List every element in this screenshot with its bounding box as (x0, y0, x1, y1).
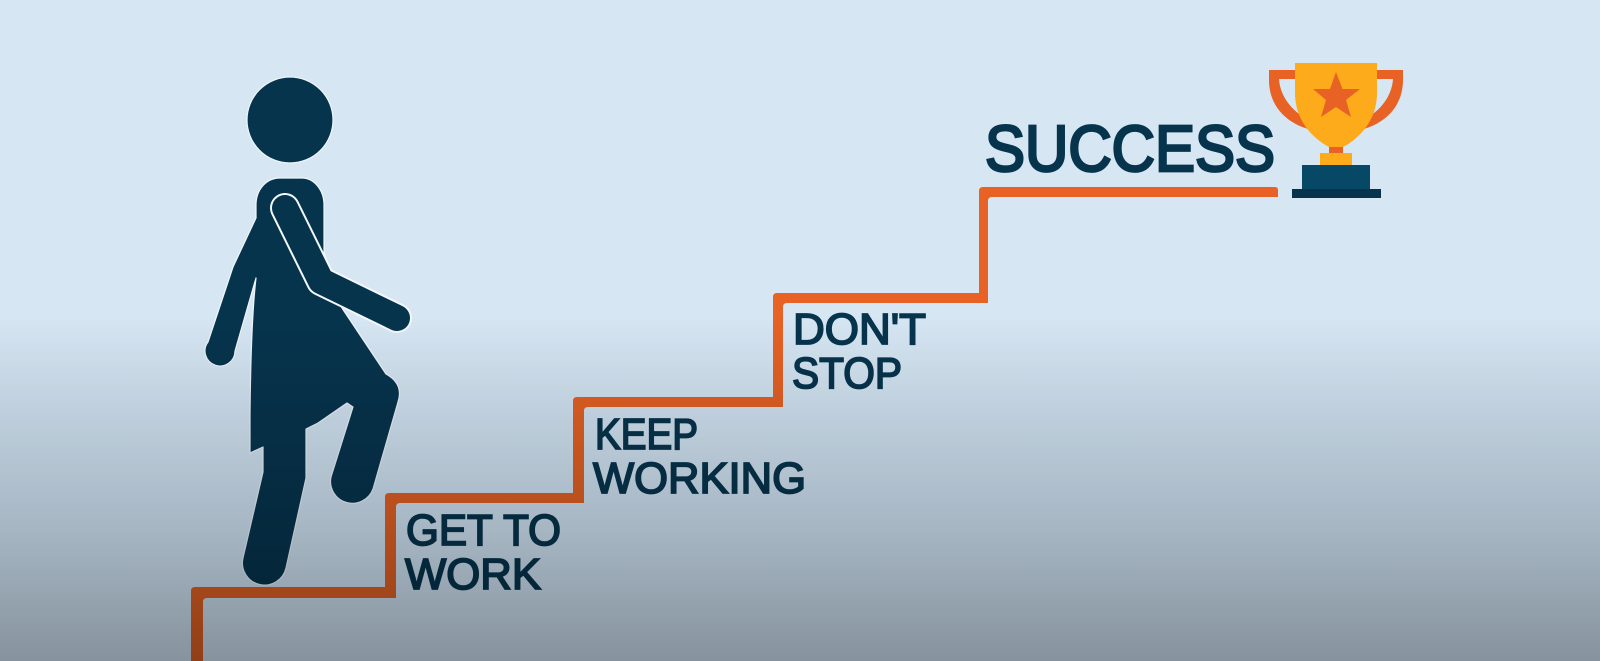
trophy base (1302, 165, 1370, 189)
step label: get to work (405, 506, 561, 599)
trophy cup (1295, 63, 1377, 147)
step label: don't stop: STOP (792, 349, 902, 398)
step label: don't stop: DON'T (793, 305, 926, 354)
trophy star (1313, 72, 1360, 117)
trophy neck (1320, 153, 1352, 165)
figure: person climbing stairs (205, 77, 400, 585)
step label: keep working: WORKING (593, 454, 806, 503)
figure body, back arm, dress and legs (205, 178, 400, 585)
staircase line (191, 187, 1278, 661)
icon: trophy (1269, 63, 1403, 198)
success heading: SUCCESS (985, 112, 1275, 185)
step label: don't stop (792, 305, 926, 398)
step label: get to work: GET TO (406, 506, 561, 555)
trophy foot (1292, 189, 1381, 198)
figure front arm (285, 208, 397, 318)
trophy stem (1329, 147, 1343, 153)
figure head (247, 77, 333, 163)
step label: get to work: WORK (405, 550, 541, 599)
step label: keep working: KEEP (595, 410, 698, 459)
trophy handles (1269, 70, 1403, 129)
step label: keep working (593, 410, 806, 503)
